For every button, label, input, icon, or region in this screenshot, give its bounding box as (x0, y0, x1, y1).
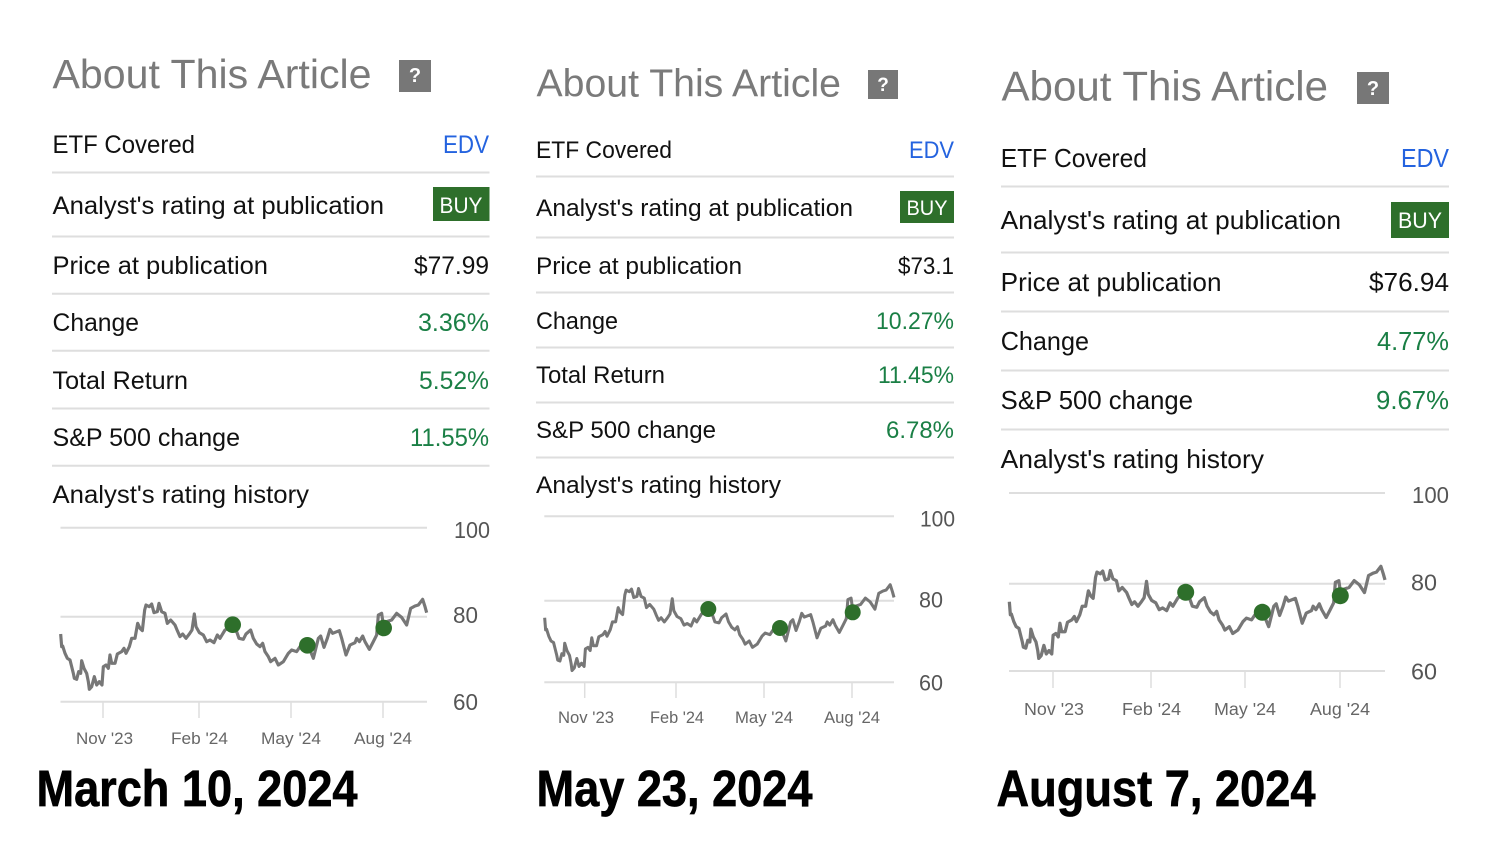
row: price at publication (52, 252, 489, 280)
row: S&P 500 change (52, 424, 489, 452)
row: S&P 500 change: 9.67% (1376, 387, 1449, 415)
icon: help (868, 70, 898, 99)
row: total return: Total Return (536, 362, 665, 389)
line chart: rating history: May '24 (735, 709, 793, 727)
line chart: rating history: Nov '23 (1024, 699, 1084, 719)
row: change: Change (52, 309, 139, 337)
row: ETF covered (536, 137, 954, 164)
row: change (52, 309, 489, 337)
row: rating at publication: Analyst's rating at publication (1001, 207, 1341, 235)
line chart: rating history (1009, 482, 1449, 719)
row: total return: 11.45% (878, 362, 954, 389)
rating history label: Analyst's rating history (52, 481, 310, 509)
line chart: rating history (544, 506, 955, 727)
row: price at publication: $77.99 (414, 252, 489, 280)
line chart: rating history: 80 (919, 588, 943, 612)
rating history label: Analyst's rating history (1001, 446, 1264, 474)
rating history label: Analyst's rating history (536, 472, 781, 499)
line chart: rating history: Aug '24 (1310, 699, 1370, 719)
row: total return (536, 362, 954, 389)
row: change: 3.36% (418, 309, 489, 337)
row: change: Change (536, 308, 618, 335)
row: price at publication: $76.94 (1369, 269, 1449, 297)
row: price at publication: Price at publication (1001, 269, 1222, 297)
row: rating at publication: BUY (440, 193, 483, 218)
line chart: rating history: Aug '24 (354, 729, 412, 748)
icon: help (399, 60, 431, 92)
line chart: rating history: 60 (453, 689, 478, 715)
row: S&P 500 change: 11.55% (410, 424, 489, 452)
line chart: rating history: 60 (1411, 658, 1437, 684)
row: rating at publication: Analyst's rating at publication (536, 195, 853, 222)
row: total return: 5.52% (419, 367, 489, 395)
row: S&P 500 change (536, 417, 954, 444)
row: price at publication: Price at publication (536, 253, 742, 280)
line chart: rating history: 100 (1412, 482, 1449, 508)
date caption: March 10, 2024 (36, 760, 358, 817)
row: total return (52, 367, 489, 395)
row: change (1001, 328, 1449, 356)
row: change (536, 308, 954, 335)
line chart: rating history: May '24 (1214, 699, 1276, 719)
line chart: rating history: May '24 (261, 729, 321, 748)
row: ETF covered: ETF Covered (536, 137, 672, 164)
row: price at publication: $73.1 (898, 253, 954, 280)
row: ETF covered (1001, 145, 1449, 173)
row: rating at publication: BUY (906, 197, 948, 220)
row: S&P 500 change: S&P 500 change (52, 424, 240, 452)
line chart: rating history: 60 (919, 670, 943, 696)
line chart: rating history: Nov '23 (76, 729, 133, 748)
row: ETF covered: EDV (909, 137, 954, 164)
row: rating at publication (52, 187, 490, 221)
row: rating at publication (1001, 202, 1449, 238)
row: ETF covered: EDV (1401, 145, 1449, 173)
row: price at publication (536, 253, 954, 280)
line chart: rating history: Feb '24 (171, 729, 228, 748)
heading: About This Article (52, 51, 372, 97)
row: ETF covered: ETF Covered (1001, 145, 1147, 173)
panel: May 23, 2024 (536, 62, 955, 817)
row: ETF covered: EDV (443, 131, 489, 159)
line chart: rating history: Feb '24 (1122, 699, 1181, 719)
heading: About This Article (536, 62, 841, 106)
row: price at publication: Price at publication (52, 252, 268, 280)
row: change: 4.77% (1377, 328, 1449, 356)
line chart: rating history: 80 (453, 602, 478, 628)
line chart: rating history: Nov '23 (558, 709, 614, 727)
row: rating at publication: Analyst's rating at publication (52, 192, 384, 220)
row: price at publication (1001, 269, 1449, 297)
line chart: rating history: 80 (1411, 570, 1437, 596)
row: S&P 500 change: S&P 500 change (1001, 387, 1193, 415)
row: total return: Total Return (52, 367, 188, 395)
row: change: Change (1001, 328, 1089, 356)
line chart: rating history: 100 (454, 517, 490, 543)
row: ETF covered (52, 131, 489, 159)
date caption: May 23, 2024 (536, 760, 813, 817)
row: ETF covered: ETF Covered (52, 131, 195, 159)
date caption: August 7, 2024 (996, 760, 1316, 817)
icon: help: ? (877, 75, 889, 96)
icon: help: ? (409, 65, 421, 87)
icon: help: ? (1367, 78, 1379, 100)
line chart: rating history: Aug '24 (824, 709, 880, 727)
line chart: rating history: Feb '24 (650, 709, 704, 727)
icon: help (1357, 72, 1389, 104)
row: rating at publication (536, 191, 954, 223)
row: S&P 500 change: S&P 500 change (536, 417, 716, 444)
row: S&P 500 change: 6.78% (886, 417, 954, 444)
panel: March 10, 2024 (36, 51, 490, 817)
panel: August 7, 2024 (996, 62, 1449, 817)
row: change: 10.27% (876, 308, 954, 335)
line chart: rating history (60, 517, 490, 748)
line chart: rating history: 100 (920, 506, 955, 532)
row: rating at publication: BUY (1398, 208, 1442, 233)
row: S&P 500 change (1001, 387, 1449, 415)
heading: About This Article (1002, 62, 1328, 110)
